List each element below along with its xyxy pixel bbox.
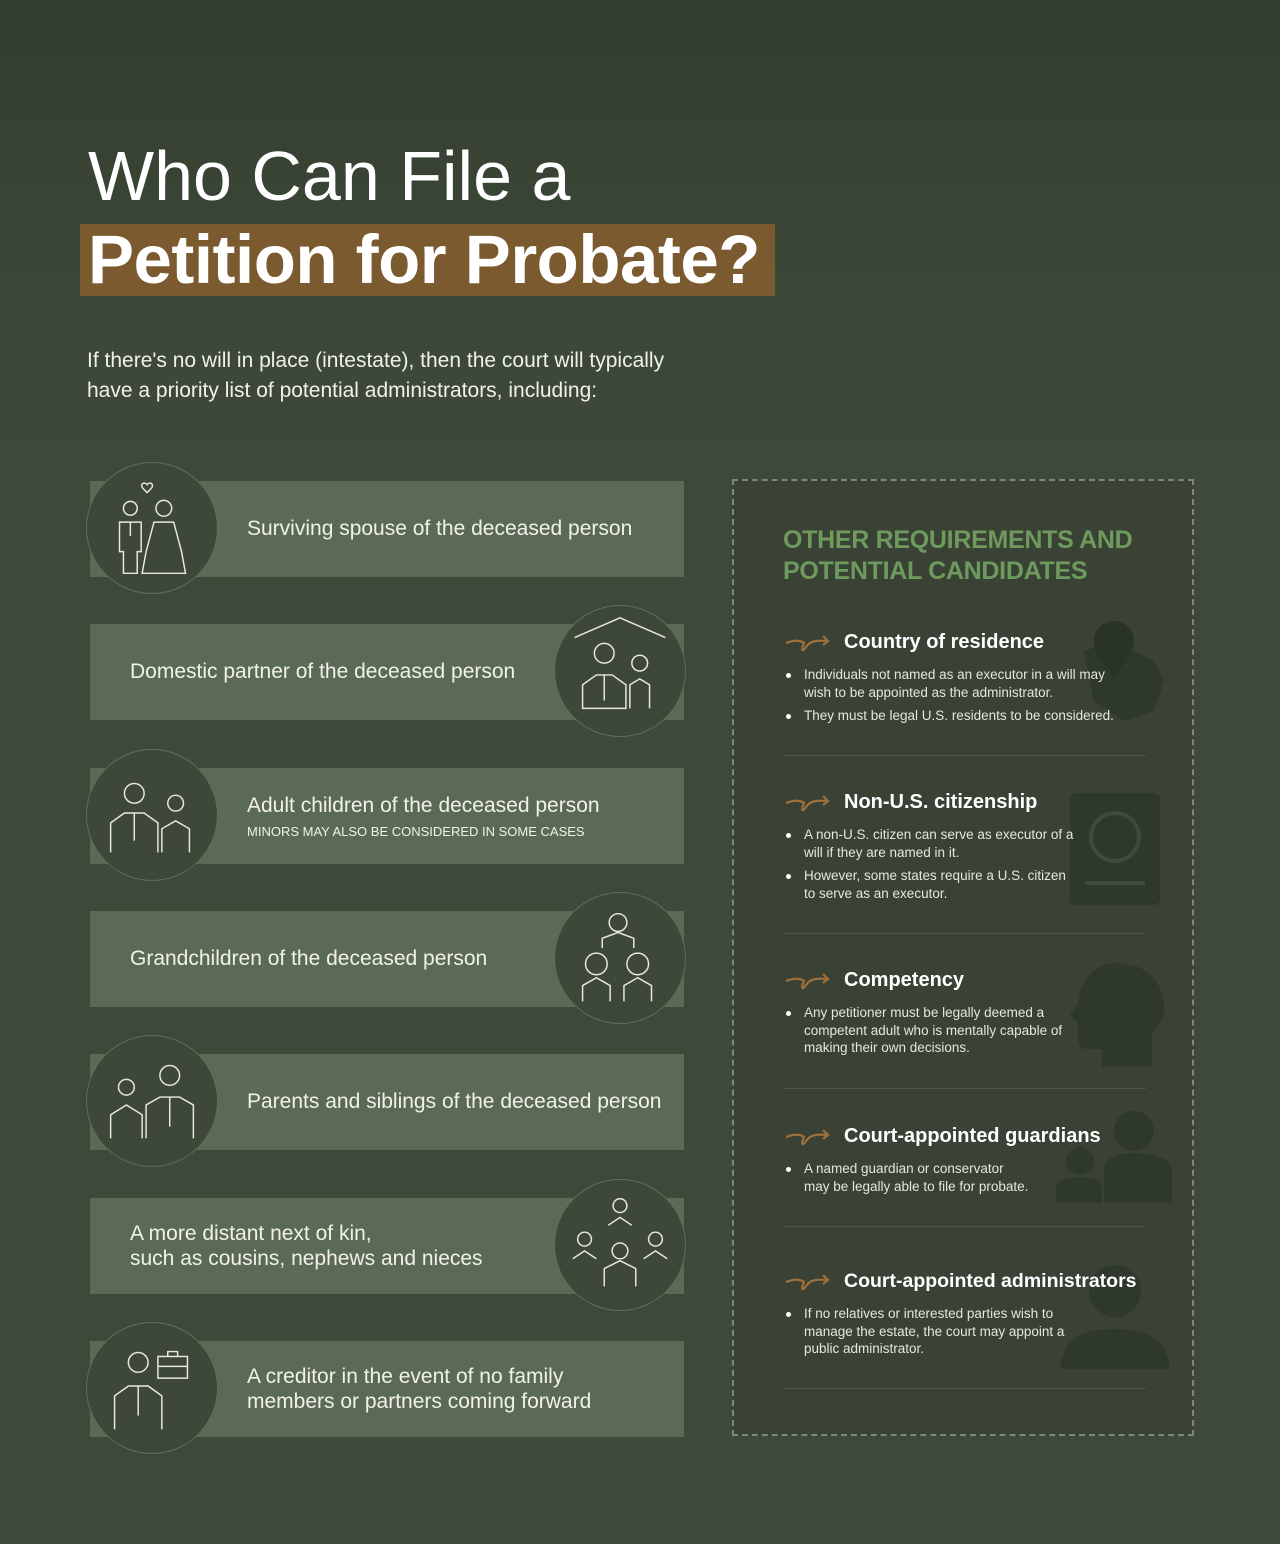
item: parents siblings: Parents and siblings of the deceased person [247,1090,661,1113]
item: spouse [86,462,684,594]
section: country of residence: Country of residence [844,631,1044,653]
icon: guardians ghost [1056,1111,1172,1203]
item: adult children [86,749,684,881]
section: court-appointed administrators [786,1270,1137,1356]
item: grandchildren [90,892,686,1024]
item: domestic partner [90,605,686,737]
icon: passport ghost [1070,793,1160,905]
title: Petition for Probate? [88,221,760,298]
item: adult children: Adult children of the deceased person [247,794,600,816]
item: distant kin [90,1179,686,1311]
section: court-appointed guardians [786,1125,1101,1194]
section: non-US citizenship [786,791,1074,900]
section: country of residence [786,631,1114,723]
item: grandchildren: Grandchildren of the deceased person [130,947,487,970]
section: court-appointed administrators: Court-appointed administrators [844,1270,1137,1292]
item: spouse: Surviving spouse of the deceased person [247,517,632,540]
item: creditor: A creditor in the event of no family [247,1365,563,1388]
icon: family [86,1035,218,1167]
section: competency: Any petitioner must be legally deemed a competent adult who is mentally capable of making their own decisions. [804,1005,1062,1055]
section: non-US citizenship: A non-U.S. citizen can serve as executor of a will if they are named in it. [804,827,1073,860]
icon: partners house [554,605,686,737]
section: court-appointed administrators: If no relatives or interested parties wish to manage the estate, the court may appoint a public administrator. [804,1306,1064,1356]
item: distant kin: such as cousins, nephews and nieces [130,1247,483,1270]
item: distant kin: A more distant next of kin, [130,1222,372,1245]
icon: map pin ghost [1084,621,1164,721]
panel heading [783,526,1132,585]
icon: administrator ghost [1060,1265,1170,1369]
icon: creditor [86,1322,218,1454]
title [80,137,775,298]
panel heading: POTENTIAL CANDIDATES [783,557,1087,585]
section: country of residence: Individuals not named as an executor in a will may wish to be appointed as the administrator. [804,667,1105,700]
title: Who Can File a [88,137,570,215]
section: non-US citizenship: However, some states require a U.S. citizen to serve as an executor. [804,868,1066,900]
icon: adults [86,749,218,881]
section: competency: Competency [844,969,964,991]
section: court-appointed guardians: may be legally able to file for probate. [804,1178,1028,1194]
section: country of residence: They must be legal U.S. residents to be considered. [804,708,1114,723]
intro text: If there's no will in place (intestate), then the court will typically have a priority list of potential administrators, including: [87,349,664,402]
icon: network [554,1179,686,1311]
item: domestic partner: Domestic partner of the deceased person [130,660,515,683]
icon: grandchildren [554,892,686,1024]
item: parents siblings [86,1035,684,1167]
section: competency [786,969,1062,1055]
icon: couple [86,462,218,594]
panel: other requirements [732,479,1194,1436]
item: adult children: MINORS MAY ALSO BE CONSIDERED IN SOME CASES [247,824,585,838]
icon: head ghost [1070,963,1164,1067]
panel heading: OTHER REQUIREMENTS AND [783,526,1132,554]
section: non-US citizenship: Non-U.S. citizenship [844,791,1037,813]
item: creditor: members or partners coming forward [247,1390,591,1413]
item: creditor [86,1322,684,1454]
section: court-appointed guardians: A named guardian or conservator [804,1161,1004,1176]
section: court-appointed guardians: Court-appointed guardians [844,1125,1101,1147]
